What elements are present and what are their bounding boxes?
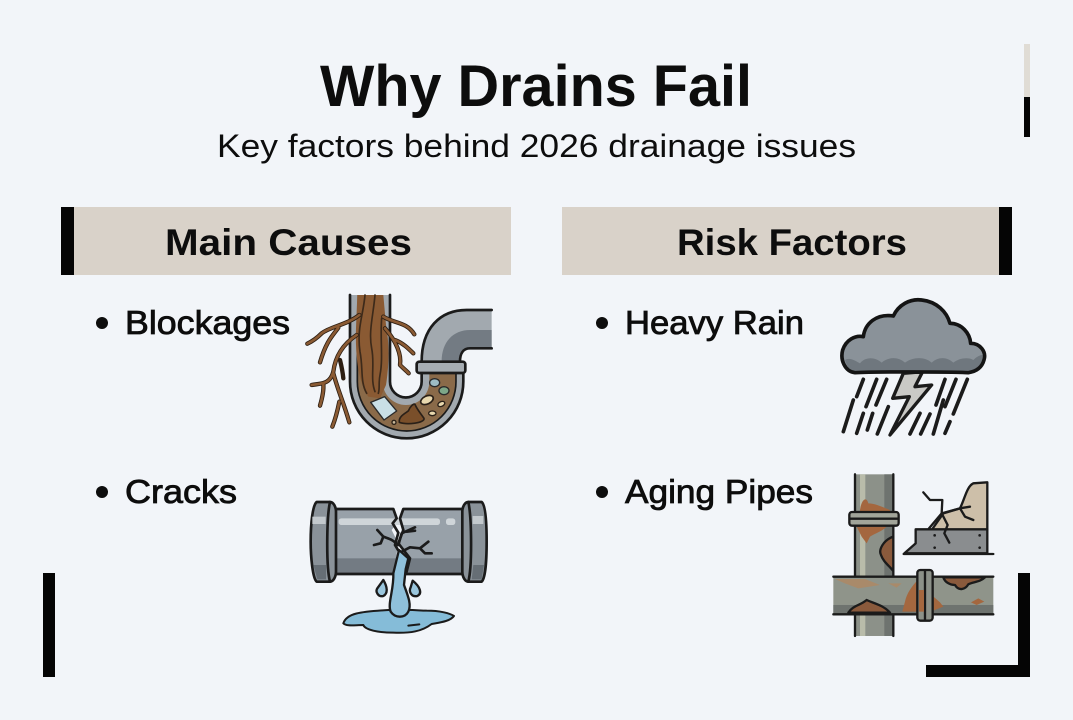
decorative corner: bottom left bar [43,573,55,677]
list item: aging pipes: Aging Pipes [625,473,813,510]
title: Why Drains Fail [320,54,752,119]
horizontal pipe [833,570,993,621]
panel header: risk factors [562,207,1012,275]
icon: cracked leaking pipe [311,502,487,633]
crumbling wall [904,482,993,554]
list item: heavy rain: Heavy Rain [625,304,804,341]
subtitle: Key factors behind 2026 drainage issues [217,128,856,164]
decorative corner: top right bar [1024,44,1030,137]
vertical pipe [849,474,899,636]
decorative corner: bottom right bracket [926,573,1030,677]
icon: storm cloud with rain and lightning [842,300,985,435]
panel header: risk factors: Risk Factors [677,222,907,263]
icon: rusted aging pipes with crumbling wall [833,474,993,636]
icon: blocked drain trap with roots [307,295,492,438]
panel header: main causes: Main Causes [165,222,412,263]
list item: blockages: Blockages [125,304,290,341]
list item: cracks: Cracks [125,473,237,510]
panel header: main causes [61,207,511,275]
